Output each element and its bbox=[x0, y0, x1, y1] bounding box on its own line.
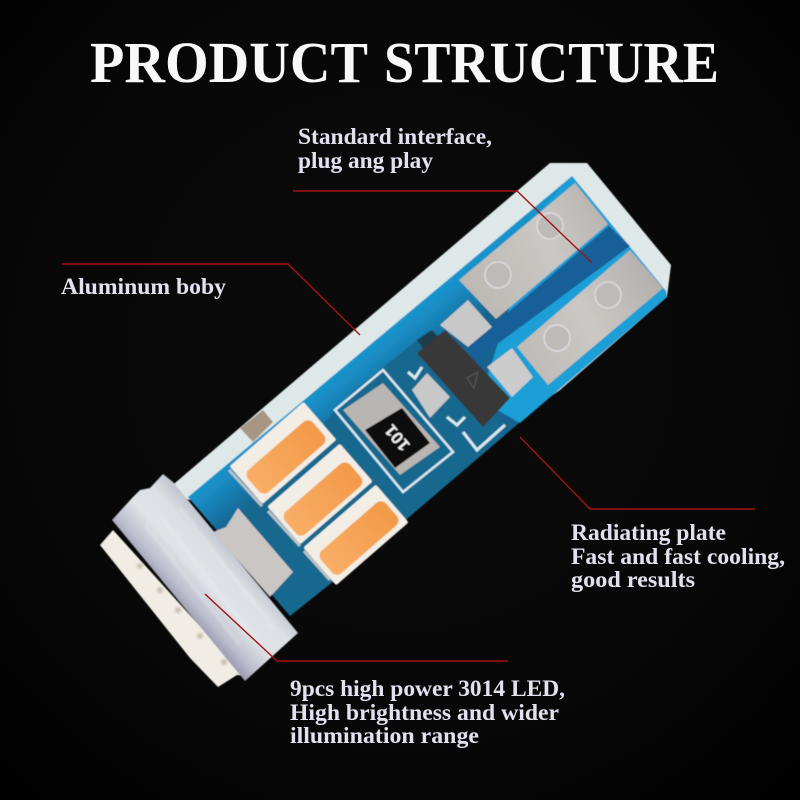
blue circuit surface bbox=[188, 176, 667, 616]
upper metal contact pad bbox=[459, 183, 608, 319]
title bbox=[90, 30, 719, 95]
dark channel between pads bbox=[470, 226, 630, 362]
white base strip bbox=[100, 530, 245, 687]
label: standard interface: Standard interface, bbox=[298, 124, 492, 149]
label: aluminum body: Aluminum boby bbox=[61, 274, 227, 299]
base solder specks bbox=[137, 563, 227, 665]
title: PRODUCT bbox=[90, 30, 368, 95]
transistor chip bbox=[417, 330, 510, 427]
lower metal contact pad bbox=[517, 250, 663, 385]
label: LED description: 9pcs high power 3014 LED, bbox=[290, 676, 565, 701]
resistor 101 bbox=[343, 383, 440, 475]
label: LED description bbox=[290, 676, 565, 748]
label: standard interface bbox=[298, 124, 492, 173]
leader line: LED bbox=[205, 594, 508, 661]
LED chip 2 bbox=[267, 444, 373, 544]
leader line: radiating plate bbox=[520, 437, 755, 509]
label: radiating plate: Radiating plate bbox=[571, 520, 726, 545]
silkscreen marks bbox=[408, 367, 505, 450]
resistor 101: 101 bbox=[381, 421, 414, 455]
aluminum board bbox=[160, 163, 671, 500]
resistor outline bbox=[335, 370, 453, 492]
leader line: interface bbox=[293, 191, 592, 263]
leader line: aluminum body bbox=[62, 264, 360, 335]
LED chip 3 bbox=[303, 485, 409, 585]
silver wrapped end cap bbox=[112, 474, 298, 681]
label: standard interface: plug ang play bbox=[298, 148, 434, 173]
LED bulb product photo bbox=[100, 163, 671, 687]
solder joints bbox=[240, 300, 533, 442]
LED solder edges bbox=[229, 470, 330, 580]
label: LED description: High brightness and wider bbox=[290, 700, 559, 725]
darker lower circuit area bbox=[225, 330, 505, 616]
label: radiating plate: good results bbox=[571, 567, 695, 592]
label: radiating plate: Fast and fast cooling, bbox=[571, 544, 785, 569]
LED chip 1 bbox=[230, 402, 336, 504]
bright blue right end bbox=[480, 176, 667, 423]
label: radiating plate bbox=[571, 520, 785, 592]
label: LED description: illumination range bbox=[290, 723, 479, 748]
title: STRUCTURE bbox=[384, 30, 719, 95]
solder blob bbox=[213, 508, 293, 597]
